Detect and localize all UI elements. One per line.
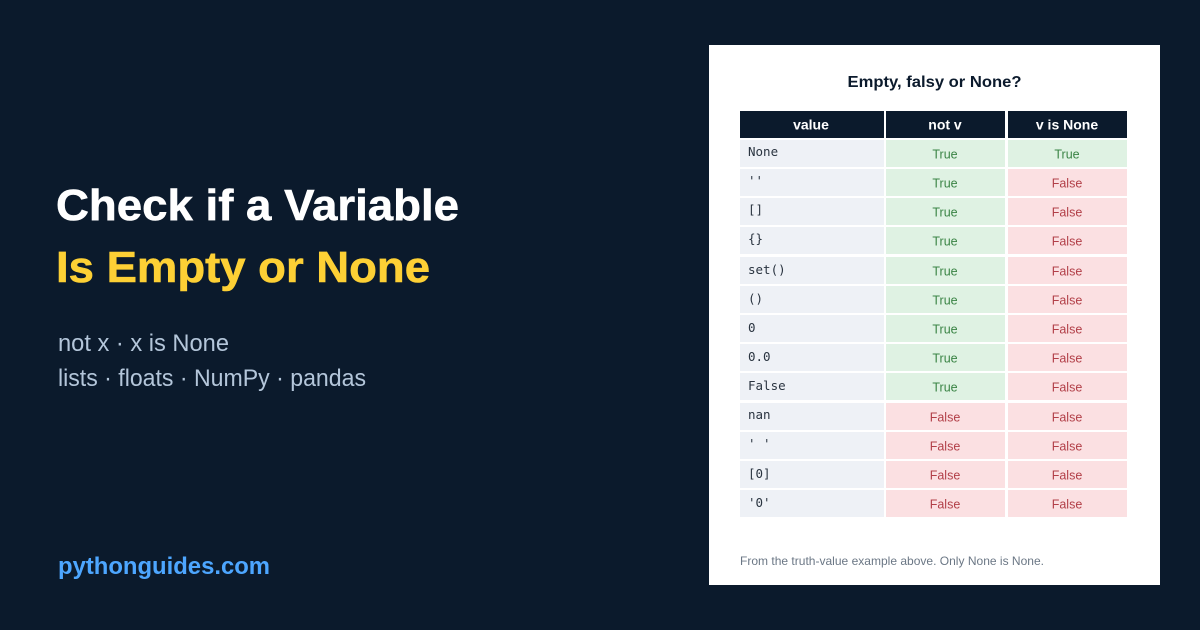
table rows: False (1052, 498, 1082, 512)
table rows: ' ' (748, 436, 771, 451)
table rows: False (1052, 352, 1082, 366)
table rows: False (1052, 234, 1082, 248)
title (56, 181, 459, 292)
subtitle: lists · floats · NumPy · pandas (58, 365, 366, 392)
table rows: False (930, 468, 960, 482)
title: Is Empty or None (56, 243, 430, 292)
table header: v is None (1036, 116, 1098, 132)
table rows: False (1052, 380, 1082, 394)
table rows: True (932, 206, 958, 220)
table rows: False (748, 378, 786, 393)
table rows: set() (748, 262, 786, 277)
table rows: True (932, 380, 958, 394)
table rows: False (930, 410, 960, 424)
table rows: 0.0 (748, 349, 771, 364)
table rows: True (932, 148, 958, 162)
table rows: True (932, 234, 958, 248)
table rows: False (1052, 294, 1082, 308)
table rows: False (1052, 440, 1082, 454)
table rows: False (1052, 322, 1082, 336)
table rows: True (1054, 148, 1080, 162)
table rows: True (932, 352, 958, 366)
title: Check if a Variable (56, 181, 459, 230)
table rows: [0] (748, 466, 771, 481)
table rows: False (1052, 468, 1082, 482)
table rows (740, 140, 1127, 517)
table rows: True (932, 176, 958, 190)
table rows: 0 (748, 320, 756, 335)
table rows: False (930, 440, 960, 454)
subtitle (58, 330, 366, 392)
table rows: True (932, 322, 958, 336)
table rows: () (748, 291, 763, 306)
table rows: True (932, 294, 958, 308)
table rows: nan (748, 407, 771, 422)
table rows: False (1052, 410, 1082, 424)
panel: table card (709, 45, 1160, 585)
table rows: True (932, 264, 958, 278)
table header (740, 111, 1127, 138)
table header: value (793, 116, 829, 132)
table title: Empty, falsy or None? (848, 74, 1022, 91)
table rows: {} (748, 231, 763, 246)
table rows: '' (748, 173, 763, 188)
table footnote: From the truth-value example above. Only None is None. (740, 554, 1044, 568)
table header: not v (928, 116, 962, 132)
table rows: '0' (748, 495, 771, 510)
site link: pythonguides.com (58, 553, 270, 580)
table rows: [] (748, 202, 763, 217)
table rows: None (748, 144, 778, 159)
table rows: False (1052, 264, 1082, 278)
table rows: False (1052, 176, 1082, 190)
subtitle: not x · x is None (58, 330, 229, 357)
table rows: False (930, 498, 960, 512)
table rows: False (1052, 206, 1082, 220)
